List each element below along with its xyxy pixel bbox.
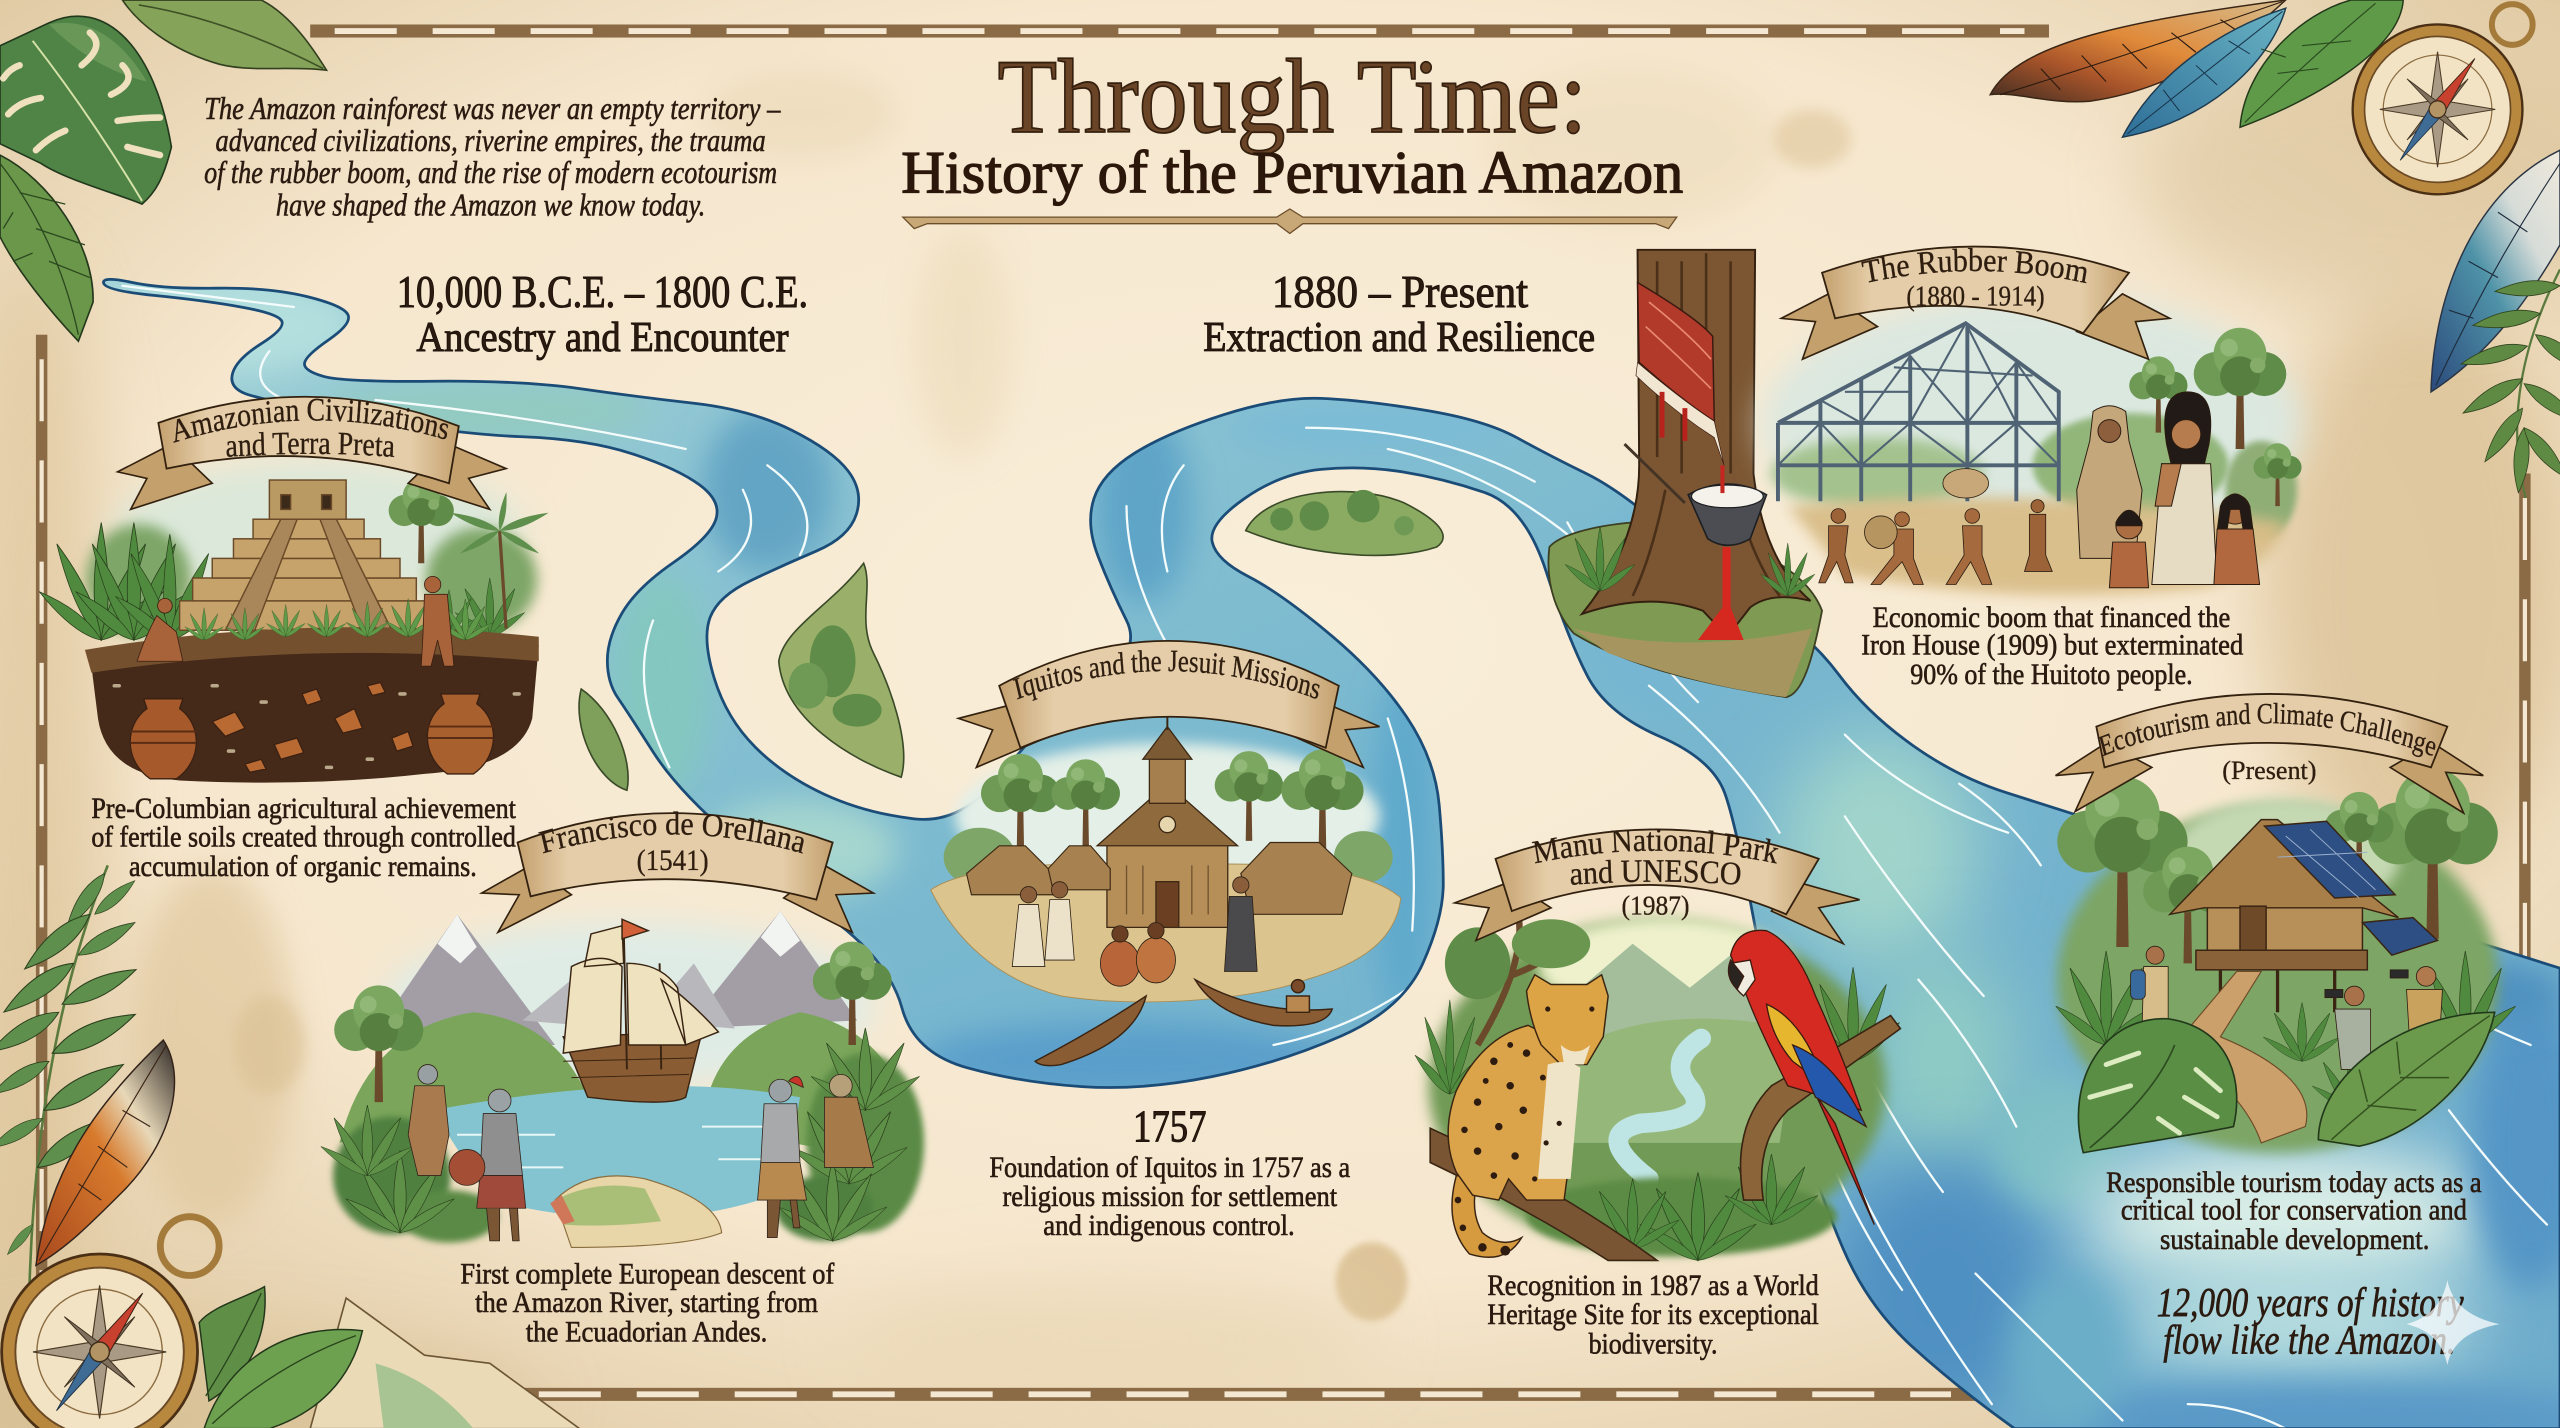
sub: Huitoto family [2077, 392, 2260, 588]
sub: background forest [1771, 328, 2302, 539]
banner title lines: (1541) [637, 845, 709, 878]
banner title lines: (1987) [1621, 889, 1690, 921]
scene: Amazonian civilizations [36, 462, 550, 783]
bottom-left map fragment [310, 1298, 580, 1428]
caption: Manu [1487, 1270, 1819, 1361]
sub: grass [1563, 526, 1816, 599]
bottom-left compass [2, 1217, 219, 1428]
era heading: extraction [1203, 266, 1595, 361]
sub: village ground [931, 864, 1401, 1002]
sub: terra preta soil [90, 638, 539, 783]
caption: Iquitos: religious mission for settlement [1002, 1181, 1337, 1213]
sub: sky and mountains [1538, 918, 1793, 1016]
banner: Francisco de Orellana [478, 811, 876, 934]
era heading: extraction: 1880 – Present [1272, 266, 1528, 317]
sub: stepped pyramid [180, 480, 428, 630]
banner: Manu National Park [1455, 822, 1860, 944]
era heading: extraction: Extraction and Resilience [1203, 314, 1595, 361]
sub: map of South America [555, 1176, 722, 1247]
scene: Francisco de Orellana [319, 911, 924, 1247]
caption: Iquitos [989, 1152, 1350, 1242]
banner title lines [1848, 242, 2103, 312]
intro text: have shaped the Amazon we know today. [276, 188, 705, 223]
sub: iron house [1778, 323, 2059, 501]
scene: rubber tree on island [1548, 250, 1822, 697]
banner title lines: and UNESCO [1570, 860, 1740, 885]
caption: ecotourism [2106, 1167, 2482, 1256]
top-right feathers [1990, 0, 2403, 137]
intro text [204, 91, 781, 223]
caption: rubber boom: Iron House (1909) but exterminated [1861, 630, 2244, 662]
era heading: ancestry [397, 266, 808, 361]
caption: Iquitos: Foundation of Iquitos in 1757 as a [989, 1152, 1350, 1184]
intro text: advanced civilizations, riverine empires, the trauma [216, 123, 766, 158]
closing statement: 12,000 years of history [2157, 1280, 2464, 1325]
scene: ecotourism [2053, 768, 2518, 1153]
caption: Amazonian civilizations: accumulation of organic remains. [129, 851, 477, 883]
sub: branch [1430, 1128, 1657, 1260]
caption: ecotourism: critical tool for conservation and [2121, 1195, 2467, 1227]
title ornament [903, 209, 1677, 233]
caption: rubber boom: 90% of the Huitoto people. [1910, 659, 2193, 691]
caption: ecotourism: Responsible tourism today acts as a [2106, 1167, 2482, 1199]
caption: Manu: biodiversity. [1589, 1329, 1718, 1361]
sub: island [1548, 522, 1822, 697]
caption: Manu: Recognition in 1987 as a World [1487, 1270, 1819, 1302]
closing statement [2157, 1280, 2464, 1363]
sub: canopy trees [2053, 768, 2518, 1113]
sub: ground [1788, 497, 2286, 595]
caption: Orellana [460, 1258, 834, 1348]
banner: ecotourism: (Present) [2222, 756, 2317, 785]
era heading: ancestry: 10,000 B.C.E. – 1800 C.E. [397, 266, 808, 317]
banner: Iquitos [956, 640, 1380, 769]
banner title lines [538, 811, 804, 878]
sub: huts [967, 842, 1352, 914]
caption: rubber boom: Economic boom that financed the [1873, 602, 2230, 634]
sub: farmers [137, 576, 454, 666]
sub: foliage [1413, 914, 1902, 1265]
title: Through Time: [998, 37, 1587, 155]
small river islands [579, 490, 1443, 790]
sub: banana leaf [2318, 1012, 2495, 1146]
sub: Andes mountains [367, 911, 857, 1045]
banner title lines: Amazonian Civilizations [173, 398, 448, 443]
intro text: of the rubber boom, and the rise of modern ecotourism [204, 155, 777, 190]
banner title lines: The Rubber Boom [1861, 248, 2086, 284]
sub: green hills [340, 1012, 914, 1159]
caption: Amazonian civilizations: Pre-Columbian agricultural achievement [91, 793, 516, 825]
sub: people [1012, 877, 1257, 986]
banner title lines: Francisco de Orellana [538, 811, 804, 854]
banner title lines: (1880 - 1914) [1906, 280, 2045, 312]
sub: river water [433, 1086, 800, 1219]
caption: Orellana: the Amazon River, starting from [475, 1287, 818, 1319]
banner title lines [1513, 822, 1798, 921]
sub: jungle vegetation [36, 478, 550, 646]
sub: scarlet macaw [1728, 930, 1874, 1225]
era heading: ancestry: Ancestry and Encounter [416, 314, 789, 361]
sub: tourists [2131, 946, 2442, 1069]
sub: eco lodge [2170, 820, 2438, 1012]
banner title line: Iquitos and the Jesuit Missions [1012, 650, 1320, 701]
caption: Amazonian civilizations: of fertile soils created through controlled [91, 822, 516, 854]
caption: rubber boom [1861, 602, 2244, 691]
sub: clay pots and shards [114, 682, 519, 779]
bottom-left feather [36, 1040, 175, 1265]
sub: galleon [563, 919, 718, 1102]
caption: Orellana: First complete European descent of [460, 1258, 834, 1290]
title [901, 37, 1683, 207]
caption: Orellana: the Ecuadorian Andes. [526, 1316, 767, 1348]
caption: Manu: Heritage Site for its exceptional [1487, 1299, 1819, 1331]
Amazon river [65, 278, 2560, 1428]
banner: the rubber boom [1778, 246, 2172, 361]
bottom-left leaves [199, 1287, 362, 1428]
bottom-left palm frond [0, 865, 140, 1290]
banner title lines: and Terra Preta [226, 432, 394, 458]
sub: workers [1819, 469, 2052, 585]
sub: trees [944, 749, 1393, 887]
right edge feather and palm [2431, 150, 2560, 498]
scene: the rubber boom [1763, 294, 2302, 595]
banner title line: Ecotourism and Climate Challenge [2098, 702, 2436, 758]
title: History of the Peruvian Amazon [901, 140, 1683, 207]
sub: canoes [1035, 980, 1332, 1066]
sub: trunk [1582, 250, 1811, 637]
banner title lines: Manu National Park [1532, 830, 1778, 864]
scene: Manu National Park [1413, 914, 1902, 1265]
sub: red rubber tap cut [1638, 282, 1714, 421]
sub: boardwalk [2175, 971, 2307, 1143]
sub: church [1097, 707, 1238, 927]
intro text: The Amazon rainforest was never an empty territory – [204, 91, 781, 126]
banner: Amazonian civilizations [115, 396, 508, 511]
sub: conquistadors [408, 1065, 873, 1241]
top-left monstera leaves [0, 0, 327, 341]
caption: Iquitos: and indigenous control. [1043, 1210, 1295, 1242]
scene: Iquitos and Jesuit missions [931, 707, 1401, 1066]
caption: Amazonian civilizations [91, 793, 516, 883]
sub: collection cup [1688, 484, 1767, 545]
closing statement: flow like the Amazon. [2163, 1318, 2456, 1363]
sub: jaguar [1448, 975, 1608, 1257]
date: 1757: 1757 [1133, 1100, 1207, 1151]
sub: trees and foliage [319, 942, 924, 1245]
sub: monstera leaf [2078, 1019, 2237, 1153]
top-right compass [2353, 4, 2533, 194]
sparkle [2407, 1280, 2500, 1365]
caption: ecotourism: sustainable development. [2160, 1224, 2429, 1256]
sub: winding valley river [1618, 1038, 1701, 1179]
banner: ecotourism [2056, 694, 2483, 813]
